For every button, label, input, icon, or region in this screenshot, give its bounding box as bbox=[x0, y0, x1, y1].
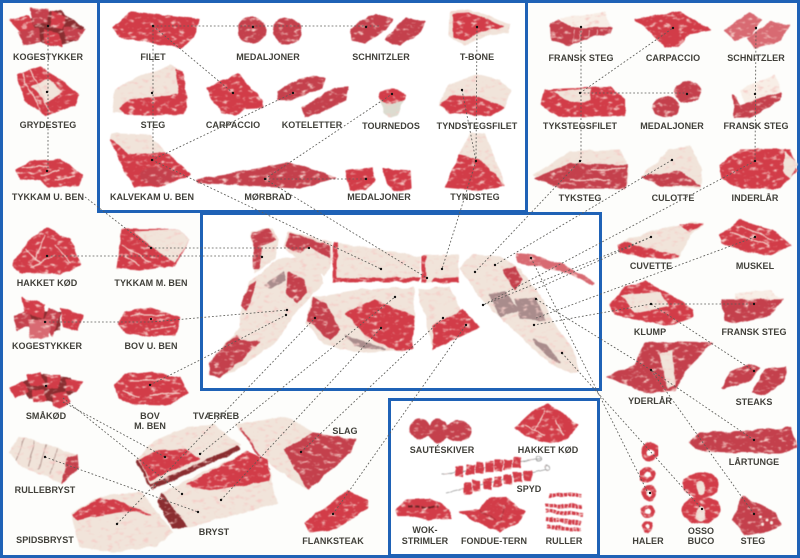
icon: hind leg bbox=[460, 255, 578, 373]
icon: kogestykker 2 bbox=[14, 298, 83, 338]
label: inderlår: INDERLÅR bbox=[732, 193, 779, 203]
cut: spyd bbox=[442, 456, 550, 494]
icon: fransk steg 3 bbox=[722, 290, 783, 323]
icon: medaljoner 2 bbox=[346, 168, 411, 191]
label: osso buco bbox=[688, 526, 714, 546]
label: carpaccio 2: CARPACCIO bbox=[646, 53, 700, 63]
label: steaks: STEAKS bbox=[736, 397, 772, 407]
icon: tykkam m. ben bbox=[117, 230, 188, 270]
icon: osso buco bbox=[682, 473, 720, 523]
cut: rullebryst bbox=[10, 437, 78, 495]
label: bov m. ben: M. BEN bbox=[134, 421, 166, 431]
label: ruller: RULLER bbox=[546, 536, 583, 546]
icon: upper neck piece bbox=[284, 232, 332, 275]
icon: haler bbox=[642, 446, 656, 531]
icon: bov m. ben bbox=[115, 372, 187, 405]
label: klump: KLUMP bbox=[634, 327, 666, 337]
cut: carpaccio 2 bbox=[635, 12, 710, 63]
label: sautéskiver: SAUTÉSKIVER bbox=[410, 445, 475, 455]
icon: ruller bbox=[546, 495, 582, 529]
label: culotte: CULOTTE bbox=[652, 193, 694, 203]
label: osso buco: OSSO bbox=[688, 526, 714, 536]
icon: steg 2 bbox=[733, 497, 780, 535]
cut: steg 2 bbox=[733, 497, 780, 546]
cut: tværreb bbox=[136, 411, 240, 489]
cut: kogestykker bbox=[10, 8, 84, 62]
icon: sautéskiver bbox=[410, 420, 471, 442]
label: medaljoner 2: MEDALJONER bbox=[347, 192, 411, 202]
icon: bryst bbox=[158, 452, 277, 528]
cut: bov u. ben bbox=[118, 308, 180, 351]
label: fondue-tern: FONDUE-TERN bbox=[461, 536, 527, 546]
icon: filet bbox=[113, 12, 199, 48]
cut: haler bbox=[632, 446, 664, 546]
label: muskel: MUSKEL bbox=[736, 261, 775, 271]
icon: lårtunge bbox=[689, 428, 797, 453]
icon: cuvette bbox=[617, 222, 703, 259]
label: haler: HALER bbox=[632, 536, 664, 546]
label: fransk steg 3: FRANSK STEG bbox=[721, 327, 787, 337]
cut: steg bbox=[113, 66, 187, 130]
icon: belly bbox=[307, 288, 415, 352]
icon: bov u. ben bbox=[118, 308, 180, 336]
cut: tyksteg bbox=[534, 150, 628, 203]
icon: muskel bbox=[720, 220, 790, 255]
icon: klump bbox=[610, 282, 693, 325]
cut: osso buco bbox=[682, 473, 720, 546]
label: steg 2: STEG bbox=[741, 536, 765, 546]
icon: schnitzler 2 bbox=[725, 13, 790, 48]
icon: mørbrad bbox=[197, 163, 335, 188]
cut: wok-strimler bbox=[396, 499, 451, 546]
icon: flanksteak bbox=[305, 492, 367, 532]
label: wok-strimler bbox=[402, 525, 449, 546]
icon: kalvekam u. ben bbox=[110, 134, 190, 187]
icon: hakket kød bbox=[13, 228, 80, 273]
label: steg: STEG bbox=[141, 120, 165, 130]
label: flanksteak: FLANKSTEAK bbox=[302, 536, 364, 546]
icon: spyd bbox=[442, 456, 550, 493]
cut: bov m. ben bbox=[115, 372, 187, 431]
icon: flank bbox=[418, 287, 479, 349]
icon: yderlår bbox=[608, 342, 712, 392]
cut: tyndstegsfilet bbox=[437, 75, 518, 131]
icon: carpaccio 2 bbox=[635, 12, 710, 48]
connector dots bbox=[44, 25, 757, 525]
label: spidsbryst: SPIDSBRYST bbox=[16, 535, 74, 545]
icon: koteletter bbox=[277, 77, 348, 116]
icon: t-bone bbox=[449, 10, 510, 45]
icon: tyndsteg bbox=[445, 133, 505, 190]
connecting dotted lines bbox=[45, 26, 756, 524]
icon: steg bbox=[113, 66, 187, 114]
icon: culotte bbox=[642, 146, 702, 188]
label: t-bone: T-BONE bbox=[460, 52, 494, 62]
cut: medaljoner 3 bbox=[640, 82, 704, 131]
icon: fransk steg 2 bbox=[733, 75, 782, 118]
label: wok-strimler: STRIMLER bbox=[402, 536, 449, 546]
label: cuvette: CUVETTE bbox=[630, 261, 672, 271]
label: tykstegsfilet: TYKSTEGSFILET bbox=[543, 121, 618, 131]
cut: hakket kød 2 bbox=[515, 404, 579, 455]
cut: kogestykker 2 bbox=[12, 298, 83, 351]
cut: carpaccio bbox=[206, 74, 263, 130]
label: schnitzler: SCHNITZLER bbox=[352, 52, 410, 62]
label: spyd: SPYD bbox=[517, 484, 542, 494]
label: tykkam u. ben: TYKKAM U. BEN bbox=[12, 192, 84, 202]
cut: slag bbox=[235, 417, 358, 489]
cut: kalvekam u. ben bbox=[110, 134, 194, 202]
label: carpaccio: CARPACCIO bbox=[206, 120, 260, 130]
cut: inderlår bbox=[720, 150, 797, 203]
cut: småkød bbox=[10, 373, 82, 421]
cut: spidsbryst bbox=[16, 492, 173, 552]
cut: mørbrad bbox=[197, 163, 335, 202]
label: medaljoner: MEDALJONER bbox=[236, 52, 300, 62]
cut: tykkam u. ben bbox=[12, 160, 84, 202]
cut: klump bbox=[610, 282, 693, 337]
label: småkød: SMÅKØD bbox=[26, 411, 67, 421]
label: kogestykker 2: KOGESTYKKER bbox=[12, 341, 82, 351]
carcass cuts bbox=[210, 228, 595, 377]
label: fransk steg: FRANSK STEG bbox=[548, 53, 614, 63]
label: wok-strimler: WOK- bbox=[412, 525, 438, 535]
cut: grydesteg bbox=[17, 67, 78, 130]
label: tyndstegsfilet: TYNDSTEGSFILET bbox=[437, 121, 518, 131]
cut: tykkam m. ben bbox=[114, 230, 188, 288]
cut: cuvette bbox=[617, 222, 703, 271]
cut: filet bbox=[113, 12, 199, 62]
icon: småkød bbox=[10, 373, 82, 408]
panel: loin cuts frame bbox=[98, 2, 526, 212]
label: osso buco: BUCO bbox=[688, 536, 714, 546]
label: yderlår: YDERLÅR bbox=[628, 396, 672, 406]
cut: bryst bbox=[158, 452, 277, 537]
label: kogestykker: KOGESTYKKER bbox=[13, 52, 83, 62]
cut: schnitzler 2 bbox=[725, 13, 790, 63]
label: grydesteg: GRYDESTEG bbox=[20, 120, 76, 130]
label: medaljoner 3: MEDALJONER bbox=[640, 121, 704, 131]
label: bov u. ben: BOV U. BEN bbox=[124, 341, 178, 351]
icon: steaks bbox=[722, 364, 785, 395]
cut: muskel bbox=[720, 220, 790, 271]
cut: tyndsteg bbox=[445, 133, 505, 202]
cut: fransk steg bbox=[548, 12, 614, 63]
label: hakket kød: HAKKET KØD bbox=[17, 278, 78, 288]
icon: grydesteg bbox=[17, 67, 78, 115]
cut: culotte bbox=[642, 146, 702, 203]
label: bov m. ben: BOV bbox=[140, 411, 160, 421]
cut: steaks bbox=[722, 364, 785, 407]
label: slag: SLAG bbox=[332, 426, 358, 436]
icon: spidsbryst bbox=[72, 492, 173, 552]
icon: rullebryst bbox=[10, 437, 78, 483]
label: bryst: BRYST bbox=[199, 527, 230, 537]
icon: tykkam u. ben bbox=[17, 160, 82, 187]
icon: foreleg bbox=[210, 257, 323, 377]
label: tournedos: TOURNEDOS bbox=[362, 121, 420, 131]
label: filet: FILET bbox=[140, 52, 166, 62]
label: tyksteg: TYKSTEG bbox=[559, 193, 601, 203]
cut: tournedos bbox=[362, 90, 420, 131]
label: tykkam m. ben: TYKKAM M. BEN bbox=[114, 278, 188, 288]
label: tværreb: TVÆRREB bbox=[193, 411, 240, 421]
icon: medaljoner bbox=[238, 17, 301, 44]
cut: medaljoner 2 bbox=[346, 168, 411, 202]
cut: t-bone bbox=[449, 10, 510, 62]
label: kalvekam u. ben: KALVEKAM U. BEN bbox=[110, 192, 194, 202]
icon: fransk steg bbox=[551, 12, 612, 45]
cut: ruller bbox=[546, 495, 583, 546]
cut: koteletter bbox=[277, 77, 348, 130]
label: koteletter: KOTELETTER bbox=[282, 120, 343, 130]
icon: tværreb bbox=[136, 425, 240, 489]
cut: sautéskiver bbox=[410, 420, 475, 455]
icon: loin bbox=[333, 243, 420, 282]
cut: medaljoner bbox=[236, 17, 301, 62]
cut: lårtunge bbox=[689, 428, 797, 467]
icon: carpaccio bbox=[207, 74, 263, 115]
label: tyndsteg: TYNDSTEG bbox=[450, 192, 500, 202]
label: mørbrad: MØRBRAD bbox=[244, 192, 292, 202]
icon: slag bbox=[235, 417, 355, 489]
label: fransk steg 2: FRANSK STEG bbox=[723, 121, 789, 131]
cut: fransk steg 2 bbox=[723, 75, 789, 131]
label: rullebryst: RULLEBRYST bbox=[15, 485, 76, 495]
icon: tournedos bbox=[379, 90, 405, 117]
label: lårtunge: LÅRTUNGE bbox=[729, 457, 779, 467]
panel: whole carcass bbox=[202, 214, 600, 390]
icon: hakket kød 2 bbox=[515, 404, 578, 443]
icon: tyndstegsfilet bbox=[440, 75, 510, 116]
label: bov m. ben bbox=[134, 411, 166, 431]
label: schnitzler 2: SCHNITZLER bbox=[727, 53, 785, 63]
icon: small loin bbox=[422, 255, 458, 282]
icon: medaljoner 3 bbox=[653, 82, 701, 117]
cut: yderlår bbox=[608, 342, 712, 406]
icon: kogestykker bbox=[10, 8, 84, 46]
icon: fondue-tern bbox=[460, 497, 525, 532]
cut: hakket kød bbox=[13, 228, 80, 288]
cut: fondue-tern bbox=[460, 497, 527, 546]
icon: wok-strimler bbox=[396, 499, 451, 520]
label: hakket kød 2: HAKKET KØD bbox=[518, 445, 579, 455]
cut: tykstegsfilet bbox=[541, 87, 625, 131]
icon: inderlår bbox=[720, 150, 797, 188]
cut: fransk steg 3 bbox=[721, 290, 787, 337]
icon: tykstegsfilet bbox=[541, 87, 625, 116]
icon: schnitzler bbox=[351, 14, 426, 45]
cut: schnitzler bbox=[351, 14, 426, 62]
icon: tyksteg bbox=[534, 150, 628, 188]
icon: neck piece bbox=[252, 228, 278, 272]
panel: small cuts frame bbox=[390, 400, 598, 556]
icon: shank bbox=[517, 253, 595, 285]
cut: flanksteak bbox=[302, 492, 367, 546]
